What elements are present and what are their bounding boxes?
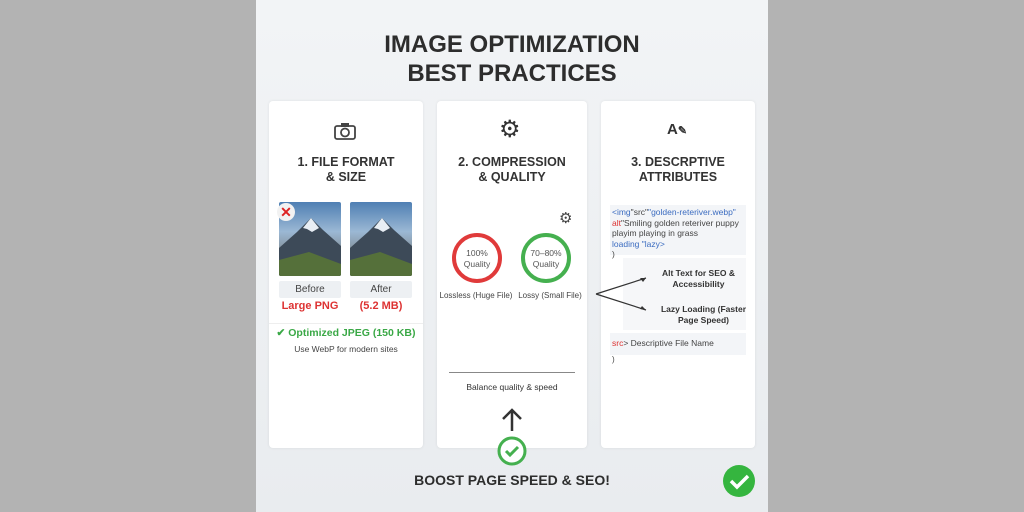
panel: file format	[269, 101, 423, 448]
optimized text: ✔ Optimized JPEG (150 KB)	[277, 327, 415, 339]
panel: file format: (5.2 MB)	[360, 300, 402, 312]
icon: gear: ⚙	[499, 116, 521, 143]
code block: loading "lazy>	[612, 238, 665, 248]
code block: )	[612, 249, 615, 259]
heading	[631, 155, 725, 184]
after image	[350, 202, 412, 276]
footer text: BOOST PAGE SPEED & SEO!	[414, 472, 610, 488]
icon: green check circle center	[498, 436, 526, 466]
heading	[298, 155, 394, 184]
heading: & QUALITY	[478, 170, 546, 184]
title	[384, 31, 640, 87]
panel: compression	[437, 101, 587, 448]
icon: green check badge	[723, 465, 755, 497]
circle 70-80%: 70–80%	[530, 248, 562, 258]
circle 70-80%	[521, 233, 571, 283]
icon: camera	[334, 123, 356, 140]
icon: A pen: A✎	[667, 121, 687, 138]
panel: attributes: Alt Text for SEO & Accessibility	[662, 268, 735, 289]
arrow up	[502, 408, 522, 431]
optimized text	[269, 323, 423, 339]
panel: compression: Lossless (Huge File)	[440, 291, 512, 300]
code 2: src> Descriptive File Name	[612, 338, 714, 348]
panel: attributes: )	[612, 355, 615, 364]
code block	[610, 205, 746, 255]
code block: alt"Smiling golden reteriver puppy playim playing in grass	[612, 218, 739, 238]
labels: Before	[295, 284, 325, 295]
title: IMAGE OPTIMIZATION	[384, 31, 640, 58]
code 2	[610, 333, 746, 355]
code block: <img"src""golden-reteriver.webp"	[612, 207, 736, 217]
panel: file format: Use WebP for modern sites	[294, 344, 398, 354]
circle 100%: Quality	[464, 259, 490, 269]
labels	[279, 281, 341, 298]
page background	[256, 0, 768, 512]
small gear: ⚙	[559, 210, 572, 227]
arrows	[596, 277, 646, 311]
heading: 2. COMPRESSION	[458, 155, 566, 169]
circle 100%: 100%	[466, 248, 488, 258]
heading: 3. DESCRPTIVE	[631, 155, 725, 169]
balance text: Balance quality & speed	[466, 382, 558, 392]
circle 70-80%: Quality	[533, 259, 559, 269]
balance text	[449, 372, 575, 392]
panel: file format: Large PNG	[282, 300, 338, 312]
panel: attributes: Lazy Loading (Faster Page Speed)	[661, 304, 746, 325]
heading: & SIZE	[326, 170, 366, 184]
annotation box	[623, 258, 746, 330]
heading	[458, 155, 566, 184]
heading: 1. FILE FORMAT	[298, 155, 394, 169]
icon: red x	[277, 203, 295, 221]
circle 100%	[452, 233, 502, 283]
panel: compression: Lossy (Small File)	[518, 291, 582, 300]
icon: red x: ✕	[280, 204, 292, 220]
heading: ATTRIBUTES	[639, 170, 717, 184]
before image	[279, 202, 341, 276]
panel: attributes	[601, 101, 755, 448]
title: BEST PRACTICES	[407, 60, 617, 87]
panel: file format: After	[370, 284, 392, 295]
